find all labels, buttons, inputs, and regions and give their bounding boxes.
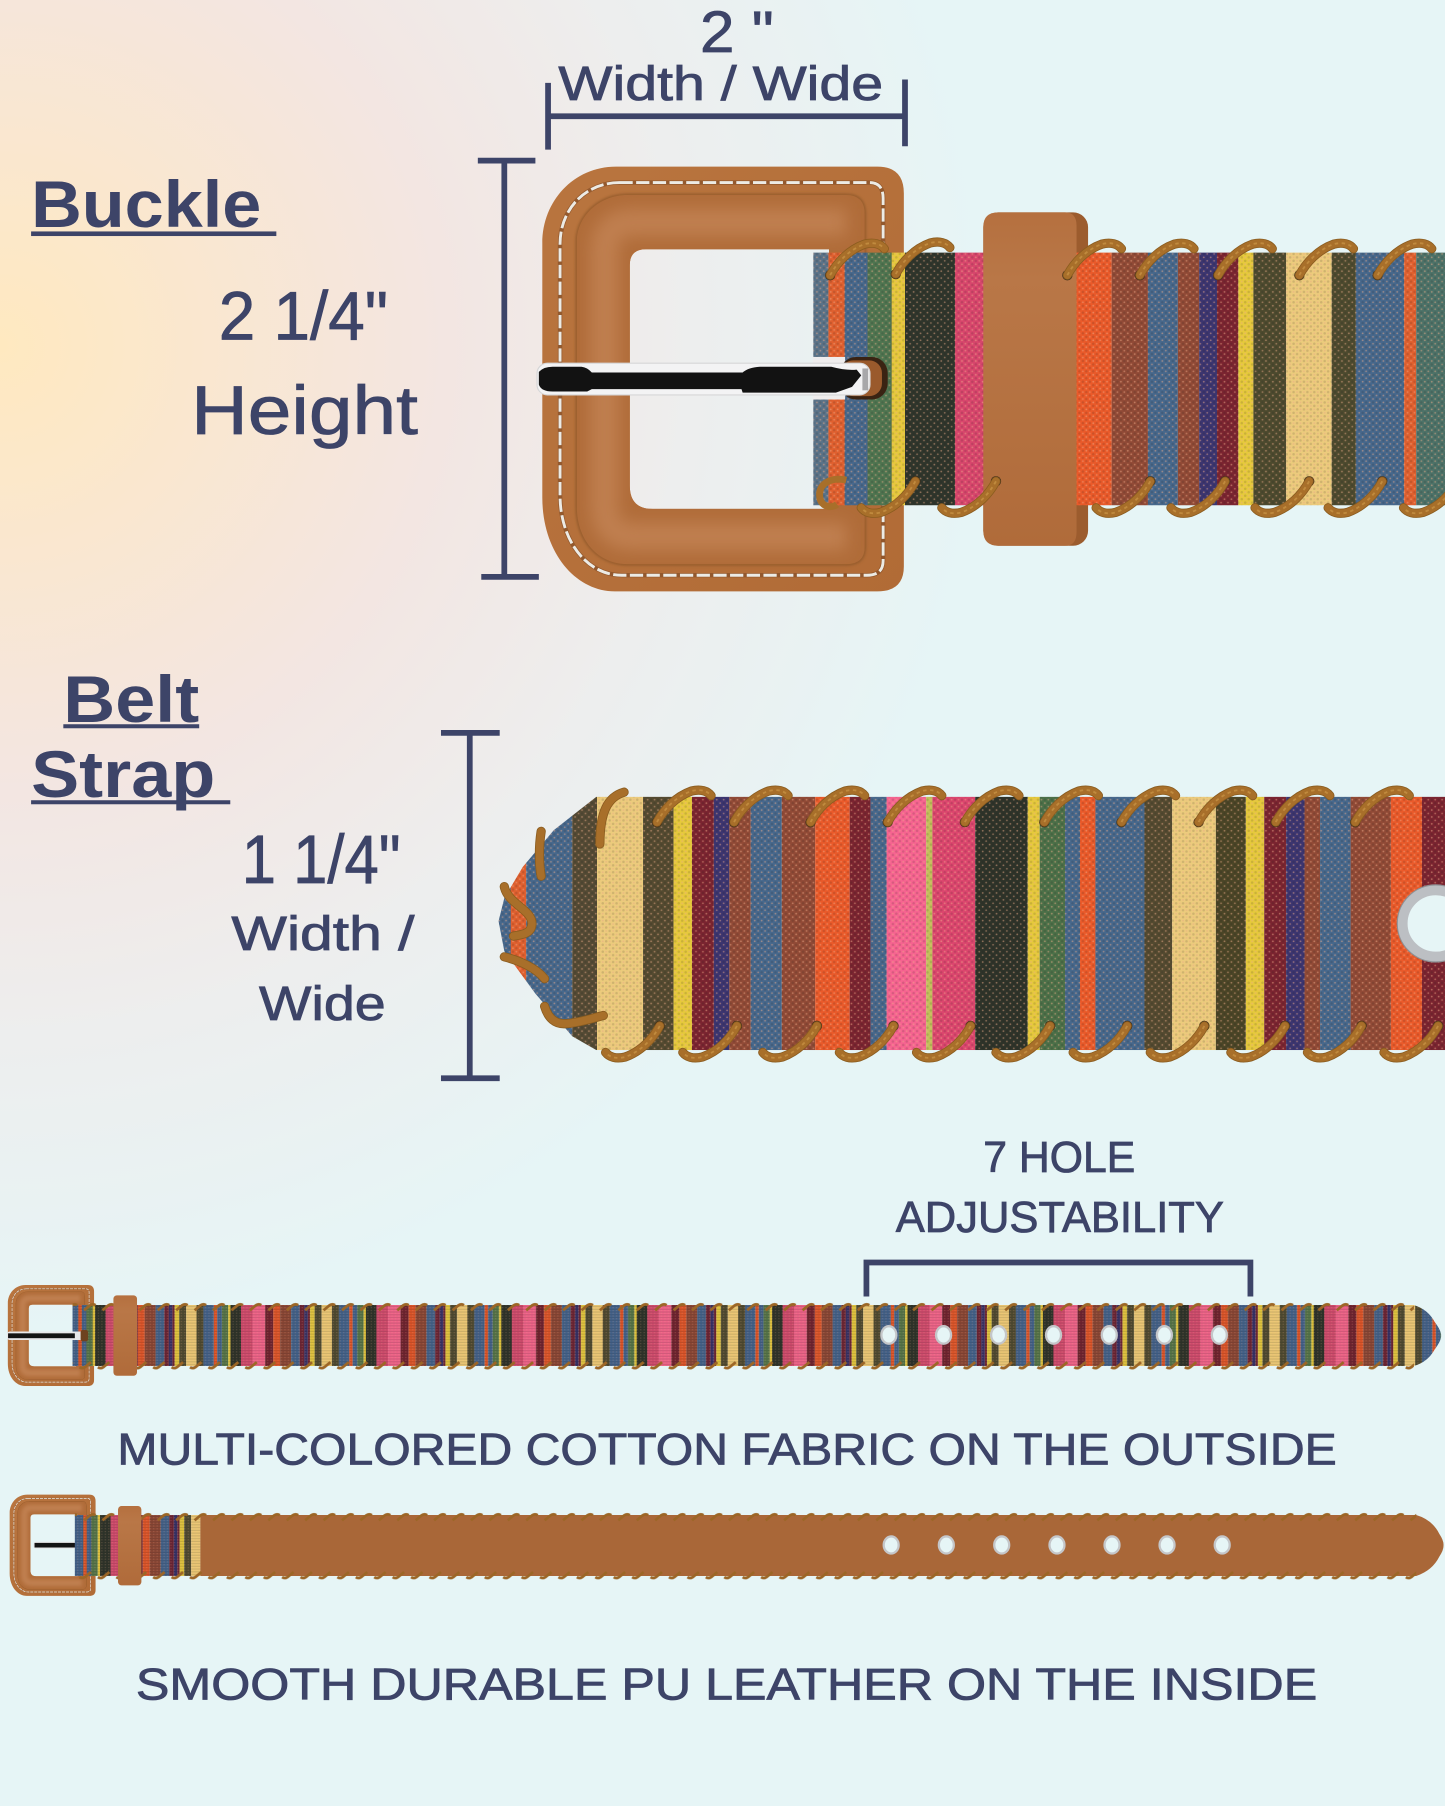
illustration: full belt, leather inside: [10, 1495, 1444, 1596]
illustration: full belt, fabric outside: [7, 1285, 1441, 1386]
text: strap width label line 1: Width /: [231, 907, 415, 961]
pin: [33, 1542, 85, 1549]
text: strap width value: 1 1/4": [242, 820, 401, 898]
text: buckle width label: Width / Wide: [558, 57, 883, 111]
eyelets: [884, 1536, 1230, 1553]
heading: Belt Strap: Belt: [63, 663, 199, 736]
measure: buckle height bracket: [478, 159, 539, 577]
bottom stitches: [73, 1358, 1414, 1371]
keeper loop: [113, 1295, 137, 1376]
buckle: [8, 1285, 94, 1386]
belt keeper loop front: [983, 212, 1077, 546]
fabric notch and pin hole: [813, 357, 888, 400]
heading: Belt Strap: [31, 663, 230, 811]
fabric strap: [73, 1305, 1441, 1366]
bracket over holes: [866, 1263, 1250, 1296]
callout: 7 hole adjustability: [866, 1133, 1250, 1296]
keeper loop back: [983, 212, 1088, 546]
heading: Buckle: Buckle: [31, 168, 261, 241]
top stitches: [73, 1301, 1414, 1313]
text: 7 HOLE: 7 HOLE: [983, 1133, 1135, 1182]
text: buckle height value: 2 1/4": [219, 277, 388, 355]
measure: strap width bracket: [441, 732, 500, 1079]
pin: [7, 1330, 88, 1341]
bottom stitches: [75, 1567, 1416, 1581]
text: buckle width value: 2 ": [700, 0, 774, 65]
measure: buckle width bracket: [548, 79, 905, 150]
leather lining: [200, 1515, 1444, 1576]
caption: cotton fabric outside: MULTI-COLORED COTTON FABRIC ON THE OUTSIDE: [117, 1424, 1337, 1475]
text: ADJUSTABILITY: ADJUSTABILITY: [896, 1193, 1224, 1242]
lacing stitches along bottom edge: [820, 476, 1445, 513]
eyelets: [881, 1326, 1227, 1344]
woven strap stripes: [495, 794, 1445, 1054]
panel: belt strap dimensions: [31, 663, 500, 1079]
lacing stitches along strap bottom: [606, 1021, 1443, 1058]
lacing stitches along top edge: [825, 242, 1432, 280]
metal pin: [537, 363, 870, 395]
buckle frame: [542, 167, 904, 591]
lacing stitches along strap top: [652, 790, 1409, 827]
top stitches: [75, 1511, 1416, 1523]
panel: buckle dimensions: [31, 0, 905, 577]
lacing stitches around strap tip: [504, 792, 624, 1024]
keeper loop: [118, 1506, 141, 1585]
text: strap width label line 2: Wide: [259, 977, 386, 1031]
illustration: buckle close-up with fabric belt: [537, 167, 1445, 591]
buckle: [10, 1495, 96, 1596]
text: Height label: Height: [191, 371, 418, 449]
metal eyelet: [1397, 885, 1445, 962]
illustration: belt strap tip close-up: [495, 790, 1445, 1058]
heading: Belt Strap: Strap: [31, 738, 215, 811]
fabric section: [75, 1515, 200, 1576]
caption: PU leather inside: SMOOTH DURABLE PU LEATHER ON THE INSIDE: [136, 1658, 1317, 1709]
woven fabric stripes: [813, 253, 1445, 505]
